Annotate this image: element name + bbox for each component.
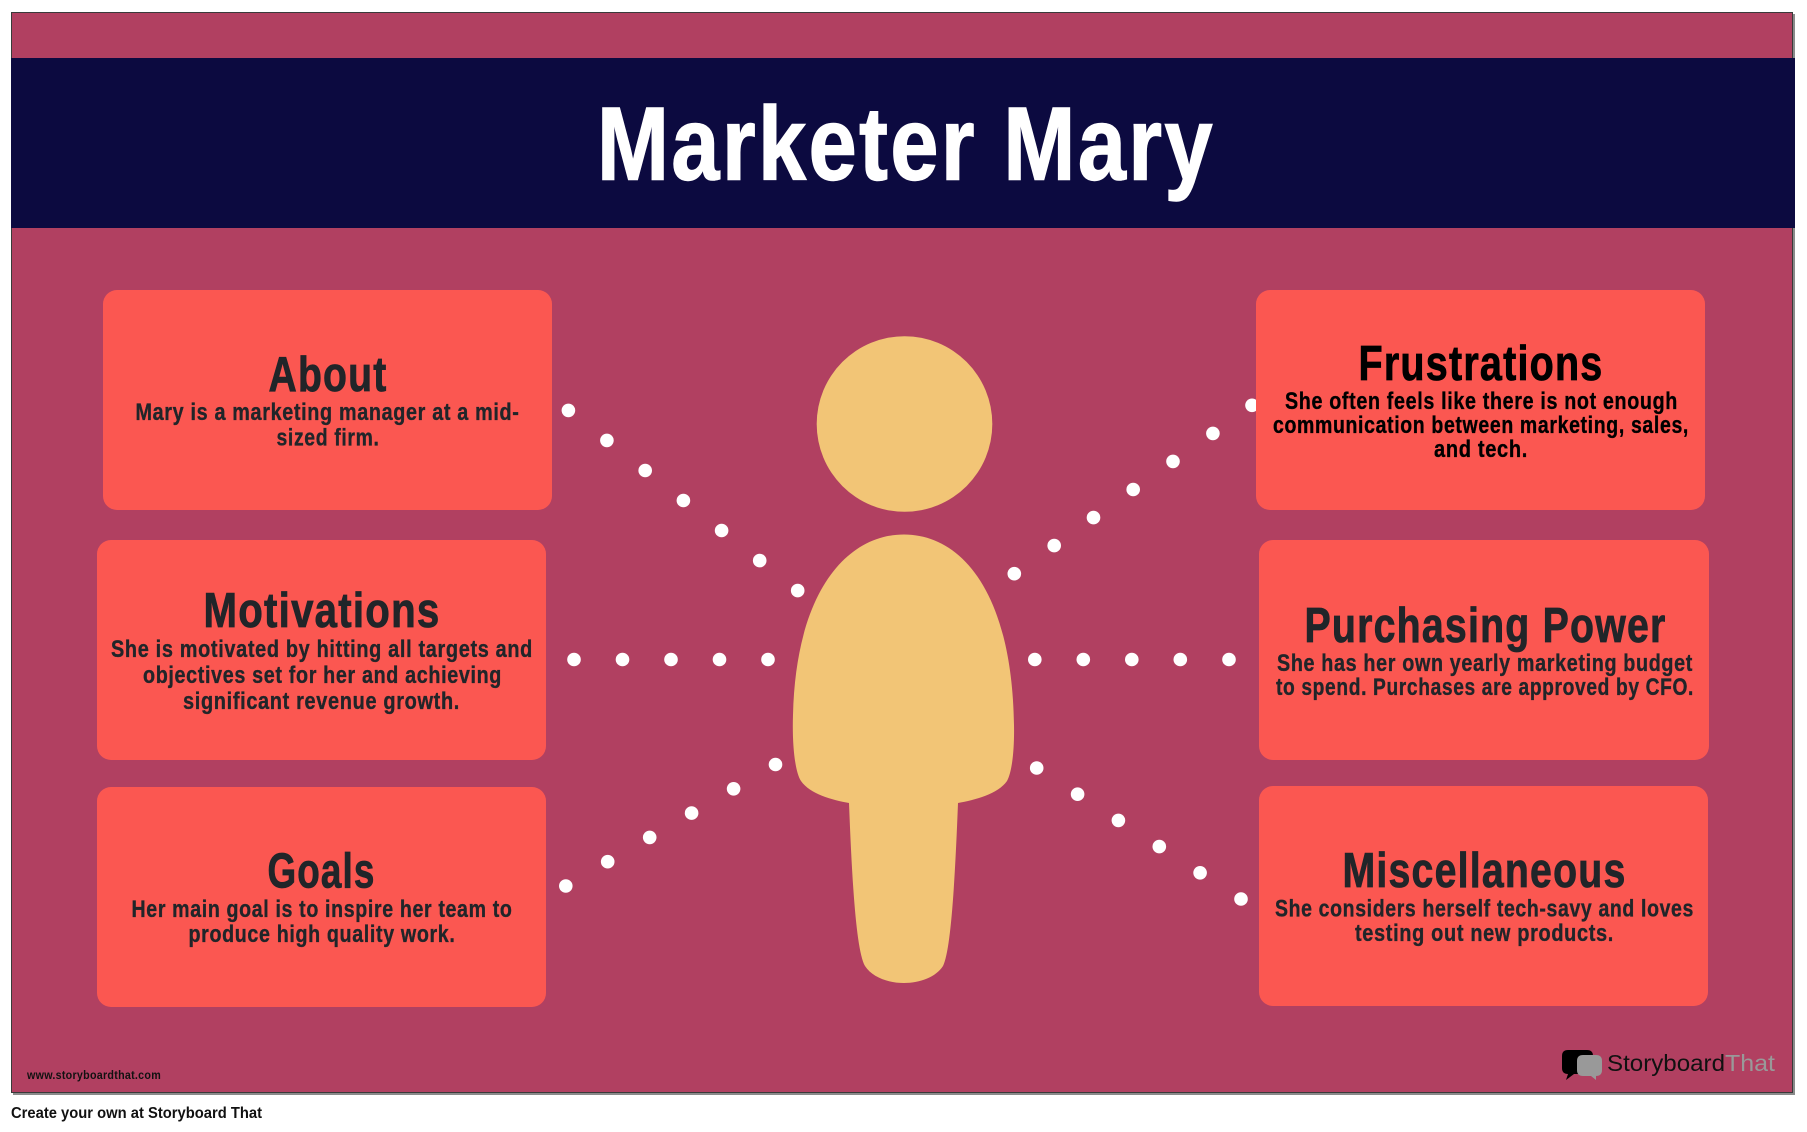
panel: About <box>103 290 552 510</box>
panel: Frustrations <box>1256 290 1705 510</box>
body: Frustrations: She often feels like there is not enough <box>1285 388 1678 415</box>
panel: Purchasing Power <box>1259 540 1709 760</box>
icon: person silhouette <box>793 336 1014 983</box>
title: Marketer Mary <box>597 86 1215 202</box>
connector: dots to Frustrations <box>1008 398 1259 580</box>
body: Motivations: objectives set for her and achieving <box>143 662 502 689</box>
body: Motivations: She is motivated by hitting all targets and <box>111 636 533 663</box>
logo wordmark: That <box>1725 1050 1776 1076</box>
body: About <box>136 399 520 452</box>
body: Goals <box>132 896 512 948</box>
panel: Motivations <box>97 540 546 760</box>
body: Frustrations: and tech. <box>1434 436 1528 463</box>
connector: dots to Miscellaneous <box>1030 761 1248 906</box>
body: Purchasing Power: to spend. Purchases are approved by CFO. <box>1276 674 1694 701</box>
body: Goals: Her main goal is to inspire her team to <box>132 896 512 923</box>
logo wordmark <box>1607 1050 1776 1076</box>
body: Frustrations: communication between marketing, sales, <box>1273 412 1689 439</box>
logo: Storyboard That <box>1562 1050 1776 1080</box>
body: About: Mary is a marketing manager at a mid- <box>136 399 520 426</box>
icon: speech bubbles <box>1562 1050 1602 1080</box>
body: Motivations: significant revenue growth. <box>183 688 460 715</box>
body: Frustrations <box>1273 388 1689 463</box>
body: Purchasing Power <box>1276 650 1694 701</box>
body: Miscellaneous <box>1275 896 1694 947</box>
body: Purchasing Power: She has her own yearly marketing budget <box>1277 650 1693 677</box>
logo wordmark: Storyboard <box>1607 1050 1725 1076</box>
title banner <box>11 58 1795 228</box>
connector: dots to Motivations <box>567 653 775 666</box>
footer credit: Create your own at Storyboard That <box>11 1105 262 1122</box>
heading: Purchasing Power: Purchasing Power <box>1304 599 1666 653</box>
panel: Miscellaneous <box>1259 786 1708 1006</box>
body: Motivations <box>111 636 533 715</box>
heading: Motivations: Motivations <box>204 584 440 638</box>
heading: Frustrations: Frustrations <box>1358 337 1604 391</box>
heading: Goals: Goals <box>268 844 376 898</box>
body: About: sized firm. <box>276 424 380 452</box>
heading: About: About <box>268 348 388 402</box>
connector: dots to Purchasing Power <box>1028 653 1236 666</box>
body: Goals: produce high quality work. <box>188 921 456 948</box>
body: Miscellaneous: She considers herself tech-savy and loves <box>1275 896 1694 922</box>
connector: dots to Goals <box>559 758 782 893</box>
panel: Goals <box>97 787 546 1007</box>
body: Miscellaneous: testing out new products. <box>1355 920 1614 947</box>
heading: Miscellaneous: Miscellaneous <box>1342 844 1626 898</box>
connector: dots to About <box>562 404 804 597</box>
website url: www.storyboardthat.com <box>26 1068 161 1082</box>
